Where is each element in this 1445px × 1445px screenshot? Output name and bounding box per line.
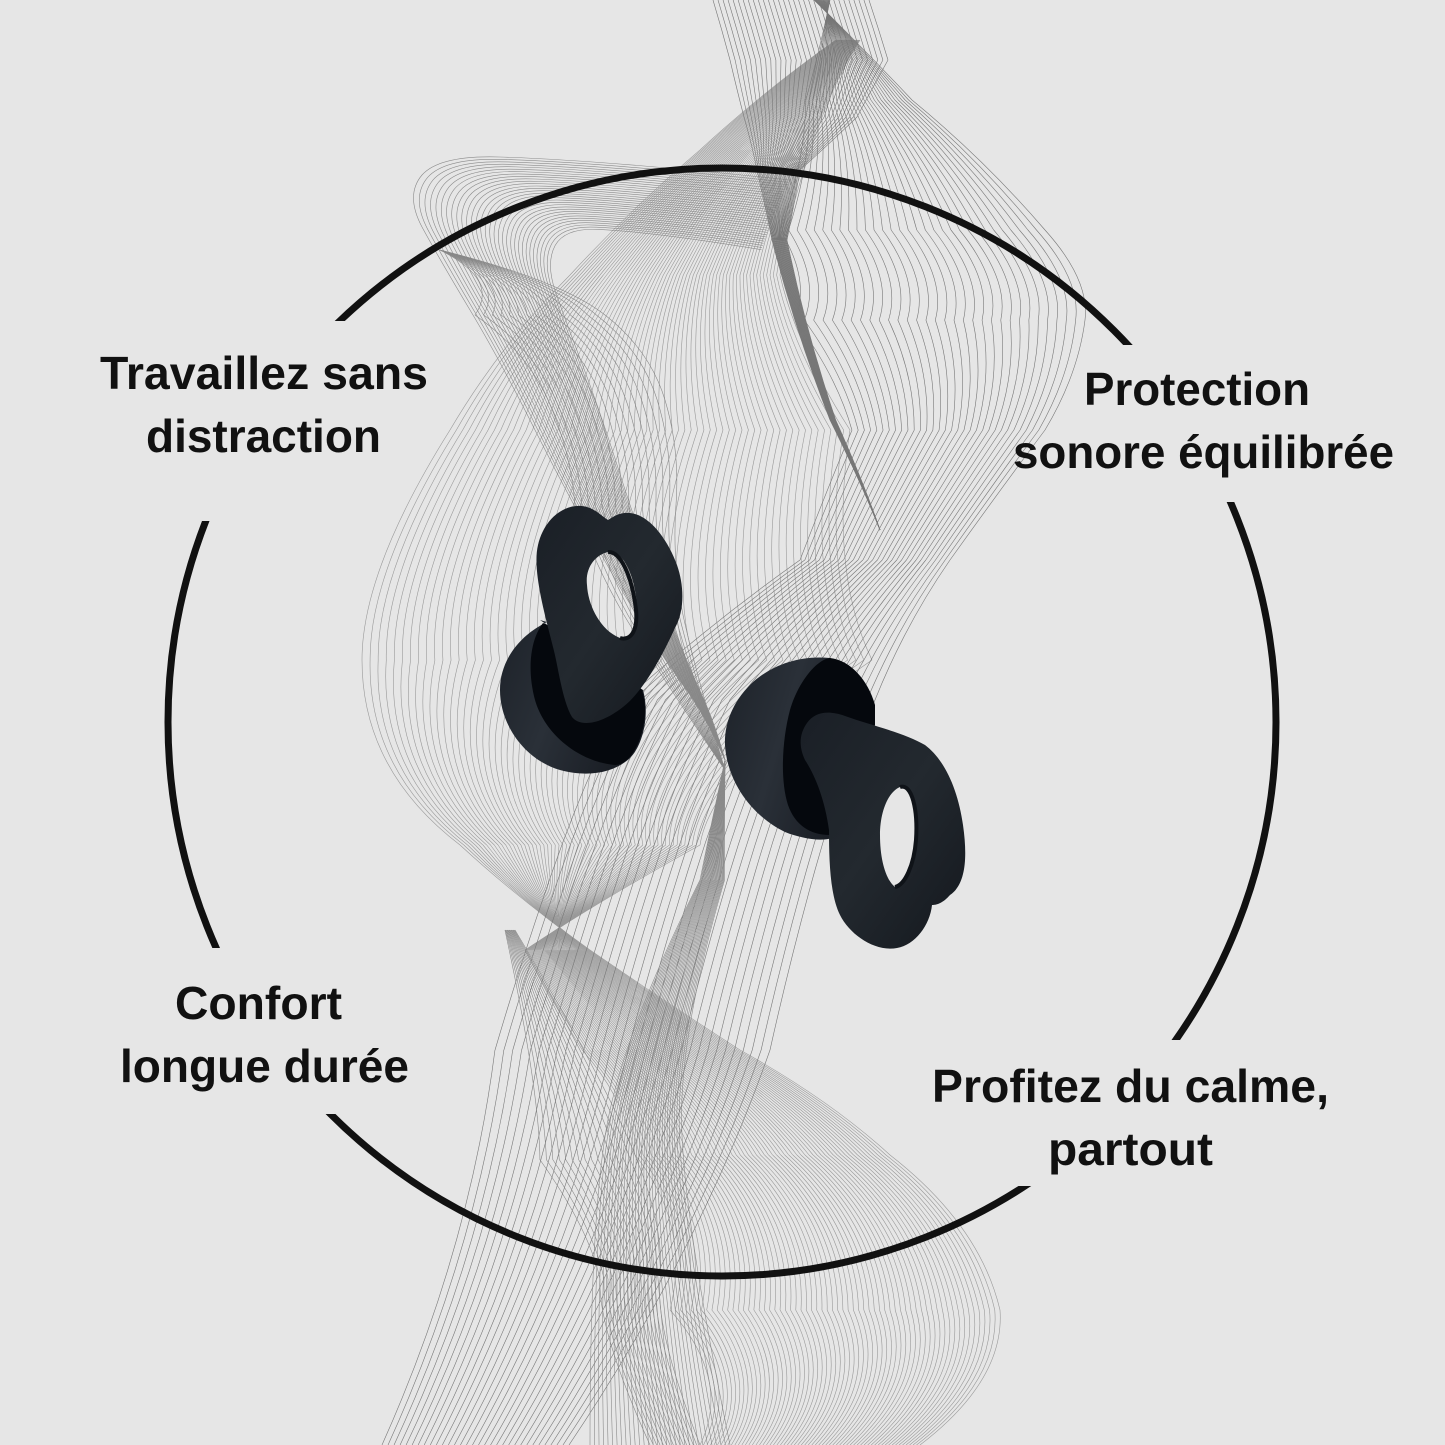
wave ribbon: main right bulge	[294, 0, 1085, 1445]
wave ribbon: bulge lower right	[335, 40, 1046, 1445]
label: Protection sonore équilibrée: Protection	[1084, 363, 1310, 415]
wave ribbon: lower hatch	[418, 930, 700, 1445]
label: Profitez du calme, partout	[932, 1060, 1329, 1175]
left earplug dome	[500, 620, 646, 774]
left earplug loop	[536, 506, 682, 723]
label: Profitez du calme, partout: partout	[1048, 1123, 1213, 1175]
label: Confort longue durée: longue durée	[120, 1040, 409, 1092]
wave ribbon: upper left bulge	[414, 157, 865, 1445]
label: Protection sonore équilibrée	[1013, 363, 1394, 478]
label: Confort longue durée	[120, 977, 409, 1092]
label: Protection sonore équilibrée: sonore équilibrée	[1013, 426, 1394, 478]
sound wave ribbons	[294, 0, 1085, 1445]
label: Travaillez sans distraction	[100, 347, 428, 462]
label: Travaillez sans distraction: Travaillez sans	[100, 347, 428, 399]
wave ribbon: centre left mesh	[310, 250, 725, 770]
right earplug dome	[725, 657, 860, 840]
right earplug hole rim	[895, 787, 916, 887]
broken circle ring	[168, 168, 1276, 1276]
left earplug dome opening	[531, 623, 645, 765]
label: Travaillez sans distraction: distraction	[146, 410, 381, 462]
icon: right earplug	[725, 657, 965, 949]
left earplug hole rim	[608, 552, 636, 639]
right earplug dome opening	[783, 658, 875, 835]
label: Profitez du calme, partout: Profitez du calme,	[932, 1060, 1329, 1112]
right earplug loop	[801, 713, 965, 949]
icon: left earplug	[500, 506, 682, 774]
wave ribbon: top band	[713, 0, 902, 530]
label: Confort longue durée: Confort	[175, 977, 342, 1029]
